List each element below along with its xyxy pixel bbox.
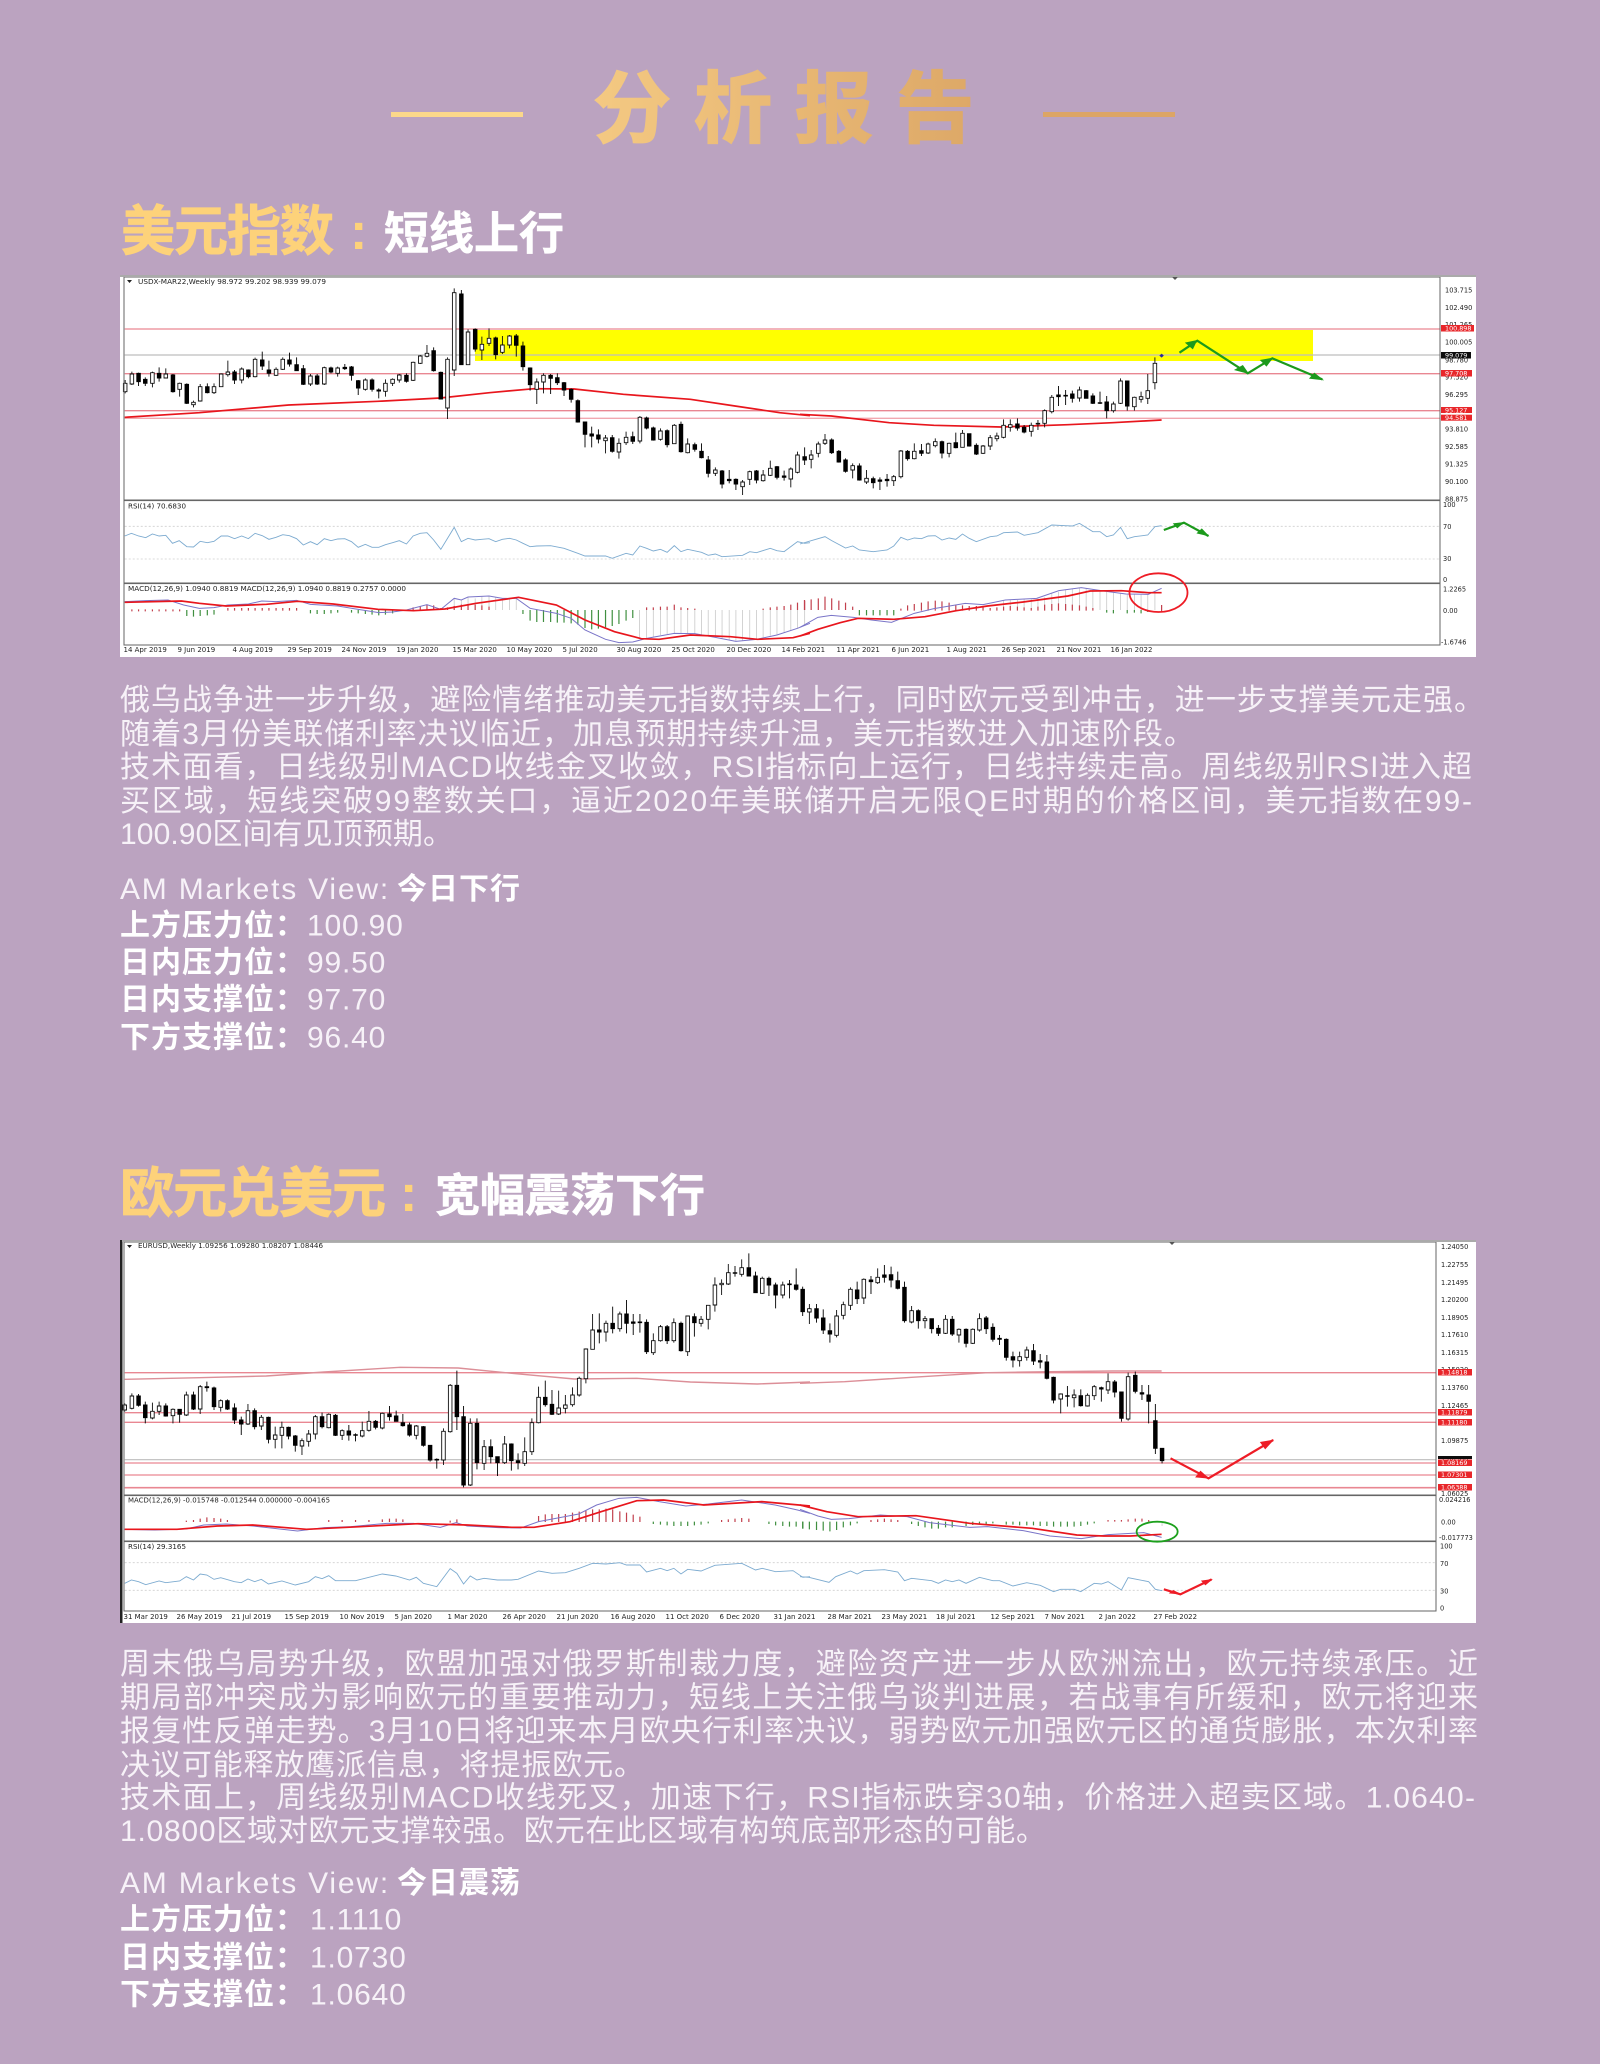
levels: USDX view: 日内压力位： — [120, 946, 306, 980]
chart labels: USDX: 14 Apr 2019 — [124, 646, 167, 654]
levels: EURUSD view: 1.0640 — [310, 1979, 407, 2012]
text block: EURUSD analysis: 周末俄乌局势升级，欧盟加强对俄罗斯制裁力度，避险资产进一步从欧洲流出，欧元持续承压。近 — [120, 1648, 1478, 1681]
text block: USDX analysis: 100.90区间有见顶预期。 — [120, 818, 453, 851]
levels: EURUSD view: AM Markets View: — [120, 1867, 390, 1900]
forecast arrows: EURUSD red — [1164, 1440, 1274, 1595]
chart labels: EURUSD: 1.14818 — [1441, 1368, 1467, 1376]
chart labels: USDX: 6 Jun 2021 — [892, 646, 929, 654]
chart labels: USDX: 97.520 — [1445, 374, 1468, 382]
RSI line: EURUSD — [125, 1563, 1162, 1592]
chart labels: EURUSD: 28 Mar 2021 — [828, 1613, 872, 1621]
chart labels: USDX: 97.708 — [1445, 370, 1467, 378]
chart labels: EURUSD: 23 May 2021 — [882, 1613, 927, 1621]
chart labels: USDX: 90.100 — [1445, 478, 1468, 486]
chart labels: EURUSD: 1.08169 — [1441, 1459, 1467, 1467]
callout: green circle on MACD — [1137, 1522, 1178, 1542]
chart labels: USDX: 11 Apr 2021 — [836, 646, 880, 654]
chart labels: USDX: 20 Dec 2020 — [726, 646, 771, 654]
text block: EURUSD analysis: 决议可能释放鹰派信息，将提振欧元。 — [120, 1749, 644, 1782]
chart labels: USDX: 95.127 — [1445, 406, 1467, 414]
chart labels: USDX: USDX-MAR22,Weekly 98.972 99.202 98.939 99.079 — [138, 278, 326, 286]
chart labels: USDX: 100 — [1443, 501, 1456, 509]
frame: EURUSD panels — [122, 1240, 1476, 1611]
chart labels: USDX: 70 — [1443, 523, 1451, 531]
chart labels: USDX — [124, 278, 1474, 654]
chart labels: USDX: 103.715 — [1445, 287, 1472, 295]
chart labels: EURUSD: 1.16315 — [1441, 1349, 1468, 1357]
chart labels: USDX: 15 Mar 2020 — [452, 646, 497, 654]
text block: EURUSD analysis: 1.0800区域对欧元支撑较强。欧元在此区域有构筑底部形态的可能。 — [120, 1815, 1046, 1848]
chart labels: USDX: 91.325 — [1445, 461, 1468, 469]
chart labels: USDX: 99.079 — [1445, 352, 1467, 360]
callout: red circle on MACD — [1129, 573, 1188, 612]
chart labels: USDX: 101.265 — [1445, 321, 1472, 329]
chart labels: EURUSD: 1.21495 — [1441, 1279, 1468, 1287]
frame: USDX panels — [120, 275, 1476, 645]
levels: EURUSD view: 日内支撑位： — [120, 1942, 306, 1975]
levels: EURUSD view: 1.1110 — [310, 1904, 402, 1937]
chart labels: EURUSD: 31 Mar 2019 — [124, 1613, 168, 1621]
chart labels: USDX: 4 Aug 2019 — [232, 646, 273, 654]
levels: USDX view: 下方支撑位： — [120, 1022, 306, 1054]
text block: USDX analysis: 买区域，短线突破99整数关口，逼近2020年美联储开启无限QE时期的价格区间，美元指数在99- — [120, 785, 1472, 818]
levels: USDX view: 97.70 — [307, 984, 386, 1016]
chart labels: EURUSD: 0.00 — [1441, 1518, 1456, 1526]
chart labels: USDX: MACD(12,26,9) 1.0940 0.8819 MACD(12,26,9) 1.0940 0.8819 0.2757 0.0000 — [128, 585, 406, 593]
heading: 欧元兑美元 宽幅震荡下行: 宽幅震荡下行 — [435, 1170, 705, 1221]
heading: 欧元兑美元 宽幅震荡下行: : — [400, 1165, 417, 1223]
text block: EURUSD analysis: 技术面上，周线级别MACD收线死叉，加速下行，RSI指标跌穿30轴，价格进入超卖区域。1.0640- — [120, 1782, 1475, 1814]
chart labels: EURUSD: 21 Jun 2020 — [556, 1613, 599, 1621]
chart labels: EURUSD: 11 Oct 2020 — [666, 1613, 709, 1621]
chart labels: USDX: 1.2265 — [1443, 586, 1466, 594]
chart labels: EURUSD: 31 Jan 2021 — [774, 1613, 815, 1621]
chart labels: EURUSD: 1.08580 — [1441, 1455, 1468, 1463]
chart labels: USDX: 24 Nov 2019 — [342, 646, 386, 654]
levels: USDX view: 今日下行 — [397, 873, 521, 906]
heading: 美元指数 短线上行: : — [350, 203, 367, 261]
levels: EURUSD view: 1.0730 — [310, 1942, 407, 1975]
candles: EURUSD left half — [123, 1253, 810, 1487]
text block: EURUSD analysis: 报复性反弹走势。3月10日将迎来本月欧央行利率决议，弱势欧元加强欧元区的通货膨胀，本次利率 — [120, 1715, 1478, 1748]
candles: EURUSD right half — [800, 1265, 1164, 1463]
chart labels: USDX: 9 Jun 2019 — [178, 646, 215, 654]
heading: 美元指数 短线上行: 短线上行 — [384, 208, 564, 259]
forecast arrows: USDX green — [1164, 340, 1324, 536]
chart labels: EURUSD: 30 — [1440, 1587, 1448, 1595]
chart: USDX weekly candlestick with RSI and MACD — [120, 275, 1476, 657]
levels: EURUSD view: 今日震荡 — [397, 1867, 521, 1900]
MACD: USDX histogram and lines — [125, 588, 1162, 643]
chart labels: EURUSD: 0 — [1440, 1604, 1444, 1612]
title: 分析报告 with side rules: 分析报告 — [593, 65, 974, 153]
chart labels: USDX: 94.581 — [1445, 414, 1467, 422]
chart labels: USDX: 0 — [1443, 576, 1447, 584]
chart labels: EURUSD: 27 Feb 2022 — [1154, 1613, 1197, 1621]
chart labels: EURUSD: 100 — [1440, 1543, 1453, 1551]
chart labels: EURUSD: 1.13760 — [1441, 1384, 1468, 1392]
chart labels: USDX: 21 Nov 2021 — [1056, 646, 1101, 654]
chart labels: EURUSD: 70 — [1440, 1560, 1448, 1568]
heading: 欧元兑美元 宽幅震荡下行 — [120, 1164, 705, 1224]
chart labels: EURUSD — [124, 1242, 1473, 1621]
chart labels: USDX: 0.00 — [1443, 607, 1458, 615]
RSI line: USDX — [125, 523, 1162, 558]
chart labels: USDX: 30 — [1443, 555, 1451, 563]
chart labels: USDX: 26 Sep 2021 — [1002, 646, 1046, 654]
chart labels: EURUSD: 1.22755 — [1441, 1261, 1468, 1269]
chart labels: EURUSD: 1.09875 — [1441, 1437, 1468, 1445]
levels: USDX view: 上方压力位： — [120, 910, 306, 942]
chart labels: USDX: 19 Jan 2020 — [396, 646, 438, 654]
levels: EURUSD view: 下方支撑位： — [120, 1979, 306, 2012]
chart labels: EURUSD: 5 Jan 2020 — [394, 1613, 432, 1621]
text block: EURUSD analysis — [120, 1648, 1478, 1848]
levels: EURUSD view: 上方压力位： — [120, 1904, 306, 1937]
chart labels: EURUSD: 1.11180 — [1441, 1418, 1467, 1426]
candles: USDX right half — [800, 354, 1164, 490]
chart labels: USDX: 16 Jan 2022 — [1110, 646, 1152, 654]
chart labels: EURUSD: 10 Nov 2019 — [340, 1613, 384, 1621]
chart labels: EURUSD: 1.06025 — [1441, 1490, 1468, 1498]
levels: USDX view: 100.90 — [307, 910, 404, 942]
text block: USDX analysis: 俄乌战争进一步升级，避险情绪推动美元指数持续上行，同时欧元受到冲击，进一步支撑美元走强。 — [120, 684, 1484, 717]
chart labels: EURUSD: 1.06388 — [1441, 1484, 1467, 1492]
levels: USDX view — [120, 873, 521, 1054]
chart labels: EURUSD: 16 Aug 2020 — [610, 1613, 655, 1621]
chart labels: USDX: 88.875 — [1445, 496, 1468, 504]
chart labels: EURUSD: 21 Jul 2019 — [232, 1613, 271, 1621]
chart labels: USDX: 100.898 — [1445, 324, 1471, 332]
text block: EURUSD analysis: 期局部冲突成为影响欧元的重要推动力，短线上关注俄乌谈判进展，若战事有所缓和，欧元将迎来 — [120, 1682, 1478, 1714]
chart labels: USDX: 29 Sep 2019 — [288, 646, 332, 654]
chart labels: USDX: 98.780 — [1445, 356, 1468, 364]
chart labels: USDX: 10 May 2020 — [506, 646, 552, 654]
levels: USDX view: 99.50 — [307, 946, 386, 980]
chart labels: EURUSD: 26 May 2019 — [176, 1613, 222, 1621]
chart labels: USDX: -1.6746 — [1441, 638, 1466, 646]
chart labels: EURUSD: 15 Sep 2019 — [284, 1613, 329, 1621]
chart labels: EURUSD: 1.20200 — [1441, 1296, 1468, 1304]
chart labels: EURUSD: 1.12465 — [1441, 1402, 1468, 1410]
chart labels: EURUSD: -0.017773 — [1439, 1534, 1473, 1542]
chart: EURUSD weekly candlestick with MACD and RSI — [120, 1240, 1476, 1623]
chart labels: USDX: 25 Oct 2020 — [672, 646, 715, 654]
heading: 欧元兑美元 宽幅震荡下行: 欧元兑美元 — [120, 1164, 385, 1224]
MACD: EURUSD histogram and lines — [125, 1497, 1162, 1539]
chart labels: EURUSD: 1.18905 — [1441, 1314, 1468, 1322]
chart labels: USDX: 30 Aug 2020 — [616, 646, 661, 654]
chart labels: USDX: RSI(14) 70.6830 — [128, 502, 186, 510]
chart labels: EURUSD: 1.24050 — [1441, 1243, 1468, 1251]
chart labels: EURUSD: 1.17610 — [1441, 1331, 1468, 1339]
chart labels: EURUSD: 7 Nov 2021 — [1044, 1613, 1085, 1621]
chart labels: EURUSD: 1 Mar 2020 — [448, 1613, 487, 1621]
chart labels: EURUSD: 0.024216 — [1439, 1496, 1470, 1504]
chart labels: EURUSD: 6 Dec 2020 — [720, 1613, 760, 1621]
chart labels: USDX: 102.490 — [1445, 304, 1472, 312]
levels: USDX view: AM Markets View: — [120, 873, 390, 906]
chart labels: EURUSD: 12 Sep 2021 — [990, 1613, 1035, 1621]
chart labels: EURUSD: 26 Apr 2020 — [502, 1613, 546, 1621]
chart labels: USDX: 93.810 — [1445, 426, 1468, 434]
chart labels: EURUSD: EURUSD,Weekly 1.09256 1.09280 1.08207 1.08446 — [138, 1242, 323, 1250]
chart labels: EURUSD: 1.15020 — [1441, 1366, 1468, 1374]
chart labels: USDX: 1 Aug 2021 — [946, 646, 987, 654]
chart labels: EURUSD: 1.11879 — [1441, 1408, 1467, 1416]
chart labels: EURUSD: 2 Jan 2022 — [1098, 1613, 1136, 1621]
heading: 美元指数 短线上行 — [121, 202, 564, 262]
chart labels: USDX: 100.005 — [1445, 339, 1472, 347]
text block: USDX analysis — [120, 684, 1484, 851]
text block: USDX analysis: 技术面看，日线级别MACD收线金叉收敛，RSI指标向上运行，日线持续走高。周线级别RSI进入超 — [120, 751, 1472, 784]
heading: 美元指数 短线上行: 美元指数 — [121, 202, 334, 262]
levels: USDX view: 日内支撑位： — [120, 984, 306, 1016]
chart labels: EURUSD: MACD(12,26,9) -0.015748 -0.012544 0.000000 -0.004165 — [128, 1496, 330, 1504]
chart labels: EURUSD: 18 Jul 2021 — [936, 1613, 976, 1621]
candles: USDX left half — [123, 288, 810, 495]
levels: EURUSD view — [120, 1867, 521, 2012]
chart labels: EURUSD: 1.07301 — [1441, 1471, 1467, 1479]
chart labels: USDX: 5 Jul 2020 — [562, 646, 598, 654]
chart labels: USDX: 96.295 — [1445, 391, 1468, 399]
chart labels: EURUSD: RSI(14) 29.3165 — [128, 1543, 186, 1551]
text block: USDX analysis: 随着3月份美联储利率决议临近，加息预期持续升温，美元指数进入加速阶段。 — [120, 718, 1194, 751]
chart labels: USDX: 92.585 — [1445, 443, 1468, 451]
chart labels: USDX: 14 Feb 2021 — [782, 646, 825, 654]
levels: USDX view: 96.40 — [307, 1022, 386, 1054]
title: 分析报告 with side rules — [391, 65, 1175, 153]
